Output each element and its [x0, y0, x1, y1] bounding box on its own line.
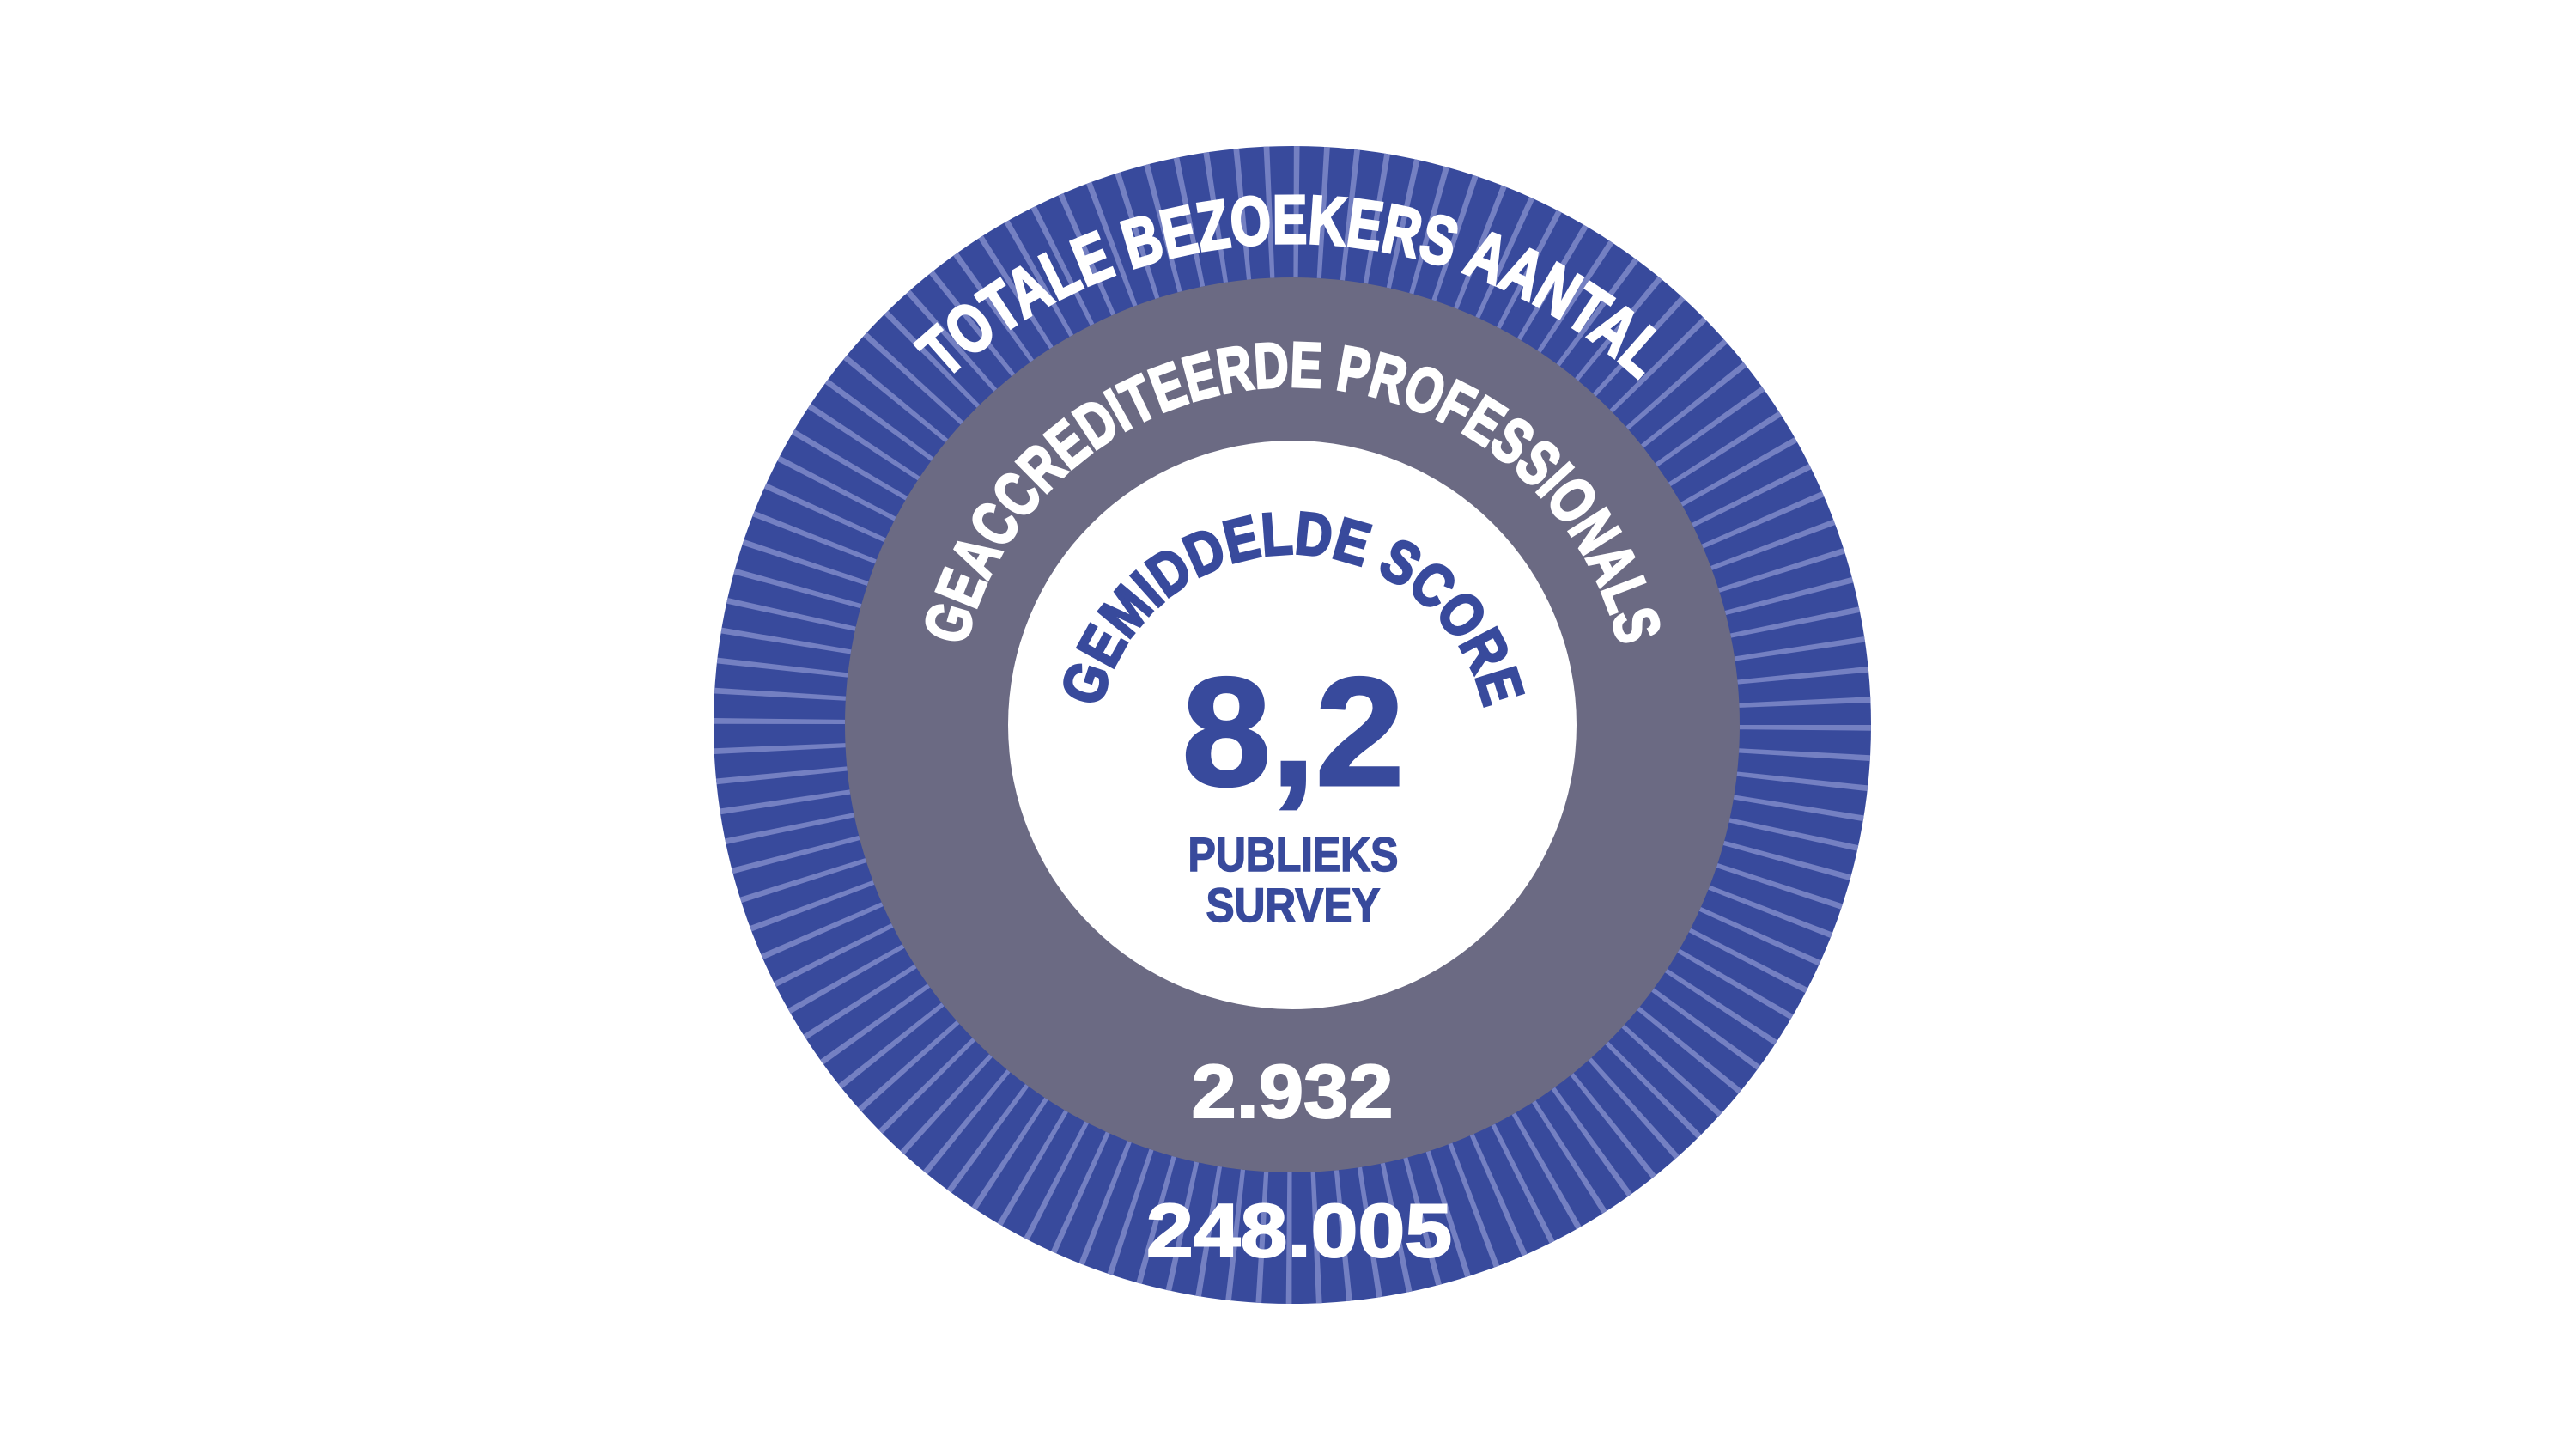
score value: 8,2 [1182, 646, 1405, 819]
professionals value: 2.932 [1192, 1049, 1393, 1134]
heading: totale bezoekers aantal: TOTALE BEZOEKERS AANTAL [912, 194, 1657, 381]
outer ring: totale bezoekers [714, 146, 1871, 1304]
heading: gemiddelde score: GEMIDDELDE SCORE [1063, 510, 1525, 708]
score label: SURVEY [1206, 878, 1381, 932]
visitors value: 248.005 [1146, 1188, 1452, 1273]
inner circle: gemiddelde score [1008, 441, 1577, 1009]
score label [1188, 827, 1398, 932]
middle ring: geaccrediteerde professionals [845, 277, 1740, 1172]
heading: geaccrediteerde professionals: GEACCREDITEERDE PROFESSIONALS [926, 341, 1661, 643]
score label: PUBLIEKS [1188, 827, 1398, 881]
